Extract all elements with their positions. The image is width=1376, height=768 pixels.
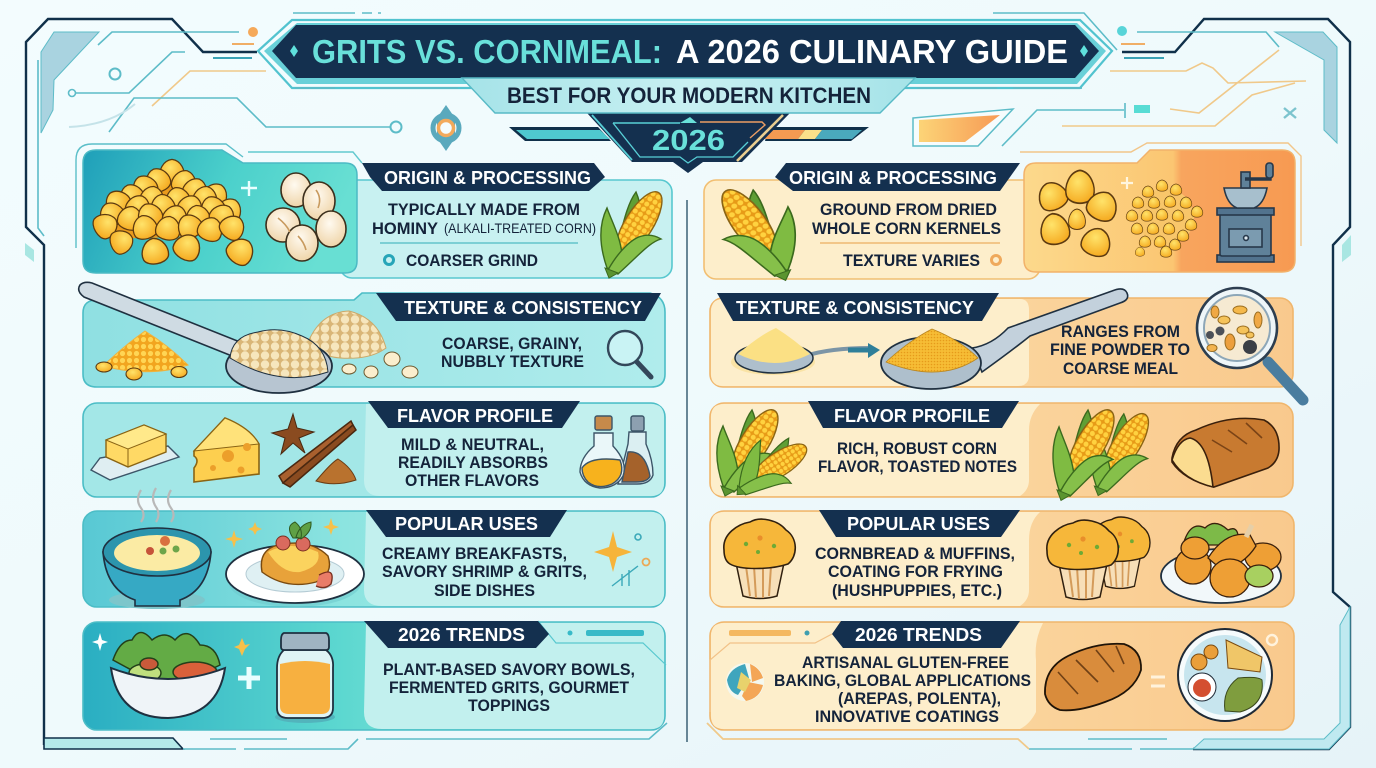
icon: corn pair <box>1053 403 1157 500</box>
body text: ARTISANAL GLUTEN-FREE <box>802 653 1009 672</box>
icon: bowl of grits <box>103 528 211 609</box>
body text <box>1050 322 1190 378</box>
section label: POPULAR USES <box>395 514 538 534</box>
icon: corn grinder <box>1217 163 1274 262</box>
section label <box>808 401 1019 428</box>
body text: NUBBLY TEXTURE <box>441 352 584 371</box>
icon: two muffins <box>1047 517 1150 600</box>
icon: spoon with grits <box>79 282 332 393</box>
icon: shrimp and grits plate <box>226 522 364 607</box>
icon: equals sign <box>1151 677 1165 686</box>
subtitle band: BEST FOR YOUR MODERN KITCHEN <box>507 83 871 108</box>
icon: global mosaic <box>726 663 764 701</box>
icon: star anise and cinnamon <box>272 414 356 487</box>
left circuit frame <box>25 19 667 749</box>
panel: cornmeal texture <box>710 288 1303 400</box>
icon: small spoon with fine cornmeal <box>731 328 870 375</box>
body text: RICH, ROBUST CORN <box>837 439 997 458</box>
section label: TEXTURE & CONSISTENCY <box>736 298 974 318</box>
body text: MILD & NEUTRAL, <box>401 435 544 454</box>
body text: TEXTURE VARIES <box>843 251 980 270</box>
panel: cornmeal 2026 trends <box>710 621 1294 730</box>
body text: (HUSHPUPPIES, ETC.) <box>832 581 1002 600</box>
icon: muffin <box>724 519 795 598</box>
body text: FERMENTED GRITS, GOURMET <box>389 678 630 697</box>
body text: COARSE, GRAINY, <box>442 334 582 353</box>
panel: cornmeal popular uses <box>710 510 1294 607</box>
right circuit frame <box>707 19 1351 749</box>
icon: yellow grits heap <box>96 331 188 380</box>
icon: whole kernels <box>1034 170 1122 260</box>
body text <box>382 544 587 600</box>
icon: ring <box>1267 635 1277 645</box>
section label <box>376 293 661 321</box>
title banner: A 2026 CULINARY GUIDE <box>676 33 1068 70</box>
body text: CORNBREAD & MUFFINS, <box>815 544 1015 563</box>
body text: HOMINY <box>372 219 439 238</box>
body text: (ALKALI-TREATED CORN) <box>444 220 596 236</box>
section label <box>362 163 605 191</box>
panel: grits texture <box>79 282 665 393</box>
icon: bread loaf <box>1045 644 1141 710</box>
icon: sparkle <box>92 633 108 651</box>
section label <box>368 401 580 428</box>
icon: sparkle <box>234 638 250 656</box>
panel: cornmeal flavor <box>710 401 1293 517</box>
icon: corn cob <box>601 185 670 278</box>
section label <box>364 621 549 648</box>
section label: FLAVOR PROFILE <box>397 406 553 426</box>
section label <box>775 163 1020 191</box>
icon: steam <box>138 488 174 522</box>
body text: BAKING, GLOBAL APPLICATIONS <box>774 671 1031 690</box>
body text: PLANT-BASED SAVORY BOWLS, <box>383 660 635 679</box>
section label <box>819 510 1020 537</box>
center divider <box>686 200 688 742</box>
body text <box>383 660 635 715</box>
section label: TEXTURE & CONSISTENCY <box>404 298 642 318</box>
body text: READILY ABSORBS <box>398 453 548 472</box>
icon: white grits heap <box>309 311 418 378</box>
body text: SAVORY SHRIMP & GRITS, <box>382 562 587 581</box>
section label: ORIGIN & PROCESSING <box>384 168 591 188</box>
body text: COATING FOR FRYING <box>828 562 1003 581</box>
year badge: 2026 <box>652 125 725 157</box>
body text: RANGES FROM <box>1061 322 1180 341</box>
icon: sparkle plus <box>241 181 257 196</box>
body text <box>815 544 1015 600</box>
icon: large spoon with cornmeal <box>881 289 1128 389</box>
year badge <box>587 113 790 173</box>
body text <box>818 439 1017 476</box>
section label: 2026 TRENDS <box>398 625 525 645</box>
body text <box>441 334 584 371</box>
icon: fried food plate <box>1161 523 1281 603</box>
body text: FLAVOR, TOASTED NOTES <box>818 457 1017 476</box>
body text <box>398 435 548 490</box>
body text <box>812 200 1001 270</box>
subtitle band <box>462 78 915 113</box>
body text: OTHER FLAVORS <box>405 471 539 490</box>
icon: cheese <box>194 418 259 482</box>
body text: TYPICALLY MADE FROM <box>388 200 580 219</box>
icon: salad bowl <box>111 632 225 718</box>
icon: butter <box>91 425 179 480</box>
title banner <box>258 13 1117 88</box>
section label: 2026 TRENDS <box>855 625 982 645</box>
icon: corn kernels heap <box>89 159 259 270</box>
panel: grits 2026 trends <box>83 621 666 730</box>
orange accent plaque <box>913 109 1013 146</box>
icon: sparkles <box>225 518 339 548</box>
icon: sparkle plus <box>1121 177 1133 189</box>
icon: magnifying glass <box>608 331 651 377</box>
icon: magnifier with grains <box>1197 288 1303 400</box>
section label: FLAVOR PROFILE <box>834 406 990 426</box>
icon: bread loaf <box>1172 418 1279 487</box>
body text <box>774 653 1031 726</box>
icon: ground corn heap <box>1126 180 1203 257</box>
icon: oil bottles <box>580 416 653 488</box>
icon: star and chart <box>594 531 650 586</box>
icon: fermented grits jar <box>275 633 335 723</box>
section label <box>717 293 999 321</box>
body text: CREAMY BREAKFASTS, <box>382 544 567 563</box>
panel: grits flavor <box>83 401 665 497</box>
icon: white hominy <box>266 173 346 261</box>
section label: ORIGIN & PROCESSING <box>789 168 997 188</box>
panel: grits origin and processing <box>76 144 672 278</box>
body text: COARSE MEAL <box>1063 359 1178 378</box>
icon: corn cob <box>712 183 795 280</box>
year ribbons <box>509 127 869 141</box>
body text: FINE POWDER TO <box>1050 340 1190 359</box>
body text: INNOVATIVE COATINGS <box>815 707 999 726</box>
section label <box>366 510 567 537</box>
panel: grits popular uses <box>83 488 665 609</box>
icon: target ornament <box>433 105 459 151</box>
section label: POPULAR USES <box>847 514 990 534</box>
body text: TOPPINGS <box>468 696 550 715</box>
icon: corn pair <box>717 403 818 517</box>
body text: SIDE DISHES <box>434 581 535 600</box>
body text: (AREPAS, POLENTA), <box>838 689 1001 708</box>
icon: global dishes plate <box>1178 629 1272 721</box>
panel: cornmeal origin and processing <box>704 143 1301 280</box>
body text: WHOLE CORN KERNELS <box>812 219 1001 238</box>
icon: plus sign <box>238 667 260 689</box>
section label <box>832 621 1020 648</box>
body text <box>372 200 596 270</box>
body text: COARSER GRIND <box>406 251 538 270</box>
title text: GRITS VS. CORNMEAL: <box>312 33 662 70</box>
icon: arrow <box>848 343 880 358</box>
body text: GROUND FROM DRIED <box>820 200 997 219</box>
